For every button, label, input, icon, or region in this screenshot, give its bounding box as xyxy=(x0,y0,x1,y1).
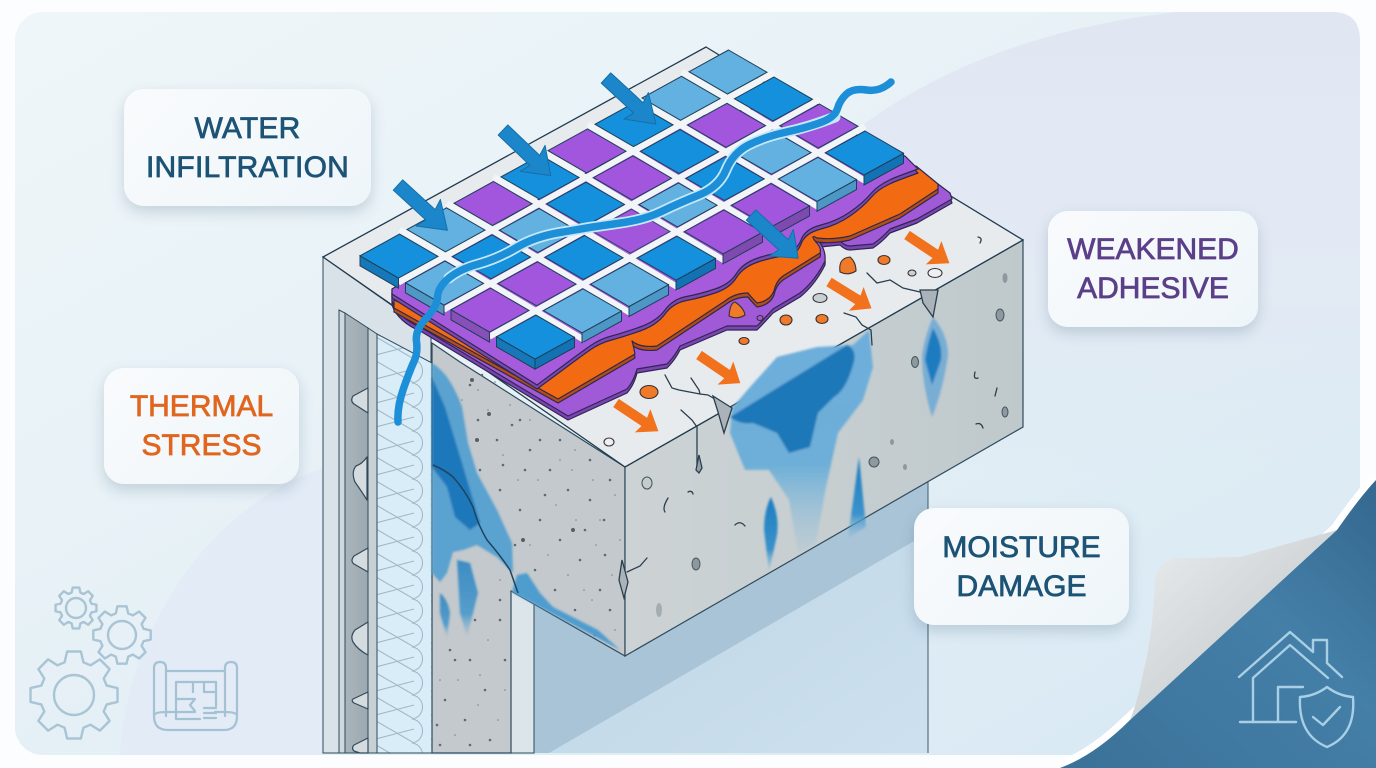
label: moisture damage: MOISTURE xyxy=(942,530,1101,564)
icon: house with shield xyxy=(1239,632,1353,747)
debris chips xyxy=(604,256,942,446)
water stains on the right face xyxy=(730,317,948,572)
concrete left face xyxy=(432,343,625,753)
label: water infiltration: WATER xyxy=(194,112,300,144)
pits on the right face xyxy=(642,273,1008,617)
label: weakened adhesive xyxy=(1048,211,1258,327)
orange layer xyxy=(394,170,938,403)
page curl corner xyxy=(1060,480,1376,768)
label: thermal stress: STRESS xyxy=(141,429,262,462)
label: thermal stress: THERMAL xyxy=(130,390,273,423)
wavy water path xyxy=(398,82,891,422)
insulation layer xyxy=(377,334,432,753)
slab top surface xyxy=(323,47,1023,467)
water stains on the left face xyxy=(432,363,620,650)
cracks and chips xyxy=(619,237,997,598)
blue downward arrows xyxy=(386,65,810,272)
concrete right face xyxy=(625,240,1023,656)
label: weakened adhesive: WEAKENED xyxy=(1067,233,1239,266)
label: thermal stress xyxy=(104,368,299,484)
upper purple layer xyxy=(392,105,918,389)
tile grout lines xyxy=(398,72,867,341)
icon: blueprint xyxy=(154,662,237,730)
label: moisture damage: DAMAGE xyxy=(956,570,1087,602)
decorative icons: gears xyxy=(30,588,151,738)
wall anchors xyxy=(352,388,368,753)
lower purple layer xyxy=(392,150,952,420)
mosaic tiles xyxy=(360,50,904,369)
label: weakened adhesive: ADHESIVE xyxy=(1077,272,1229,305)
left wall section with insulation xyxy=(323,257,432,753)
label: water infiltration xyxy=(124,89,371,206)
adhesive layers xyxy=(392,101,952,420)
label: moisture damage xyxy=(914,508,1129,625)
orange displacement arrows xyxy=(608,223,957,443)
wall below the slab xyxy=(511,482,928,753)
label: water infiltration: INFILTRATION xyxy=(146,150,349,184)
